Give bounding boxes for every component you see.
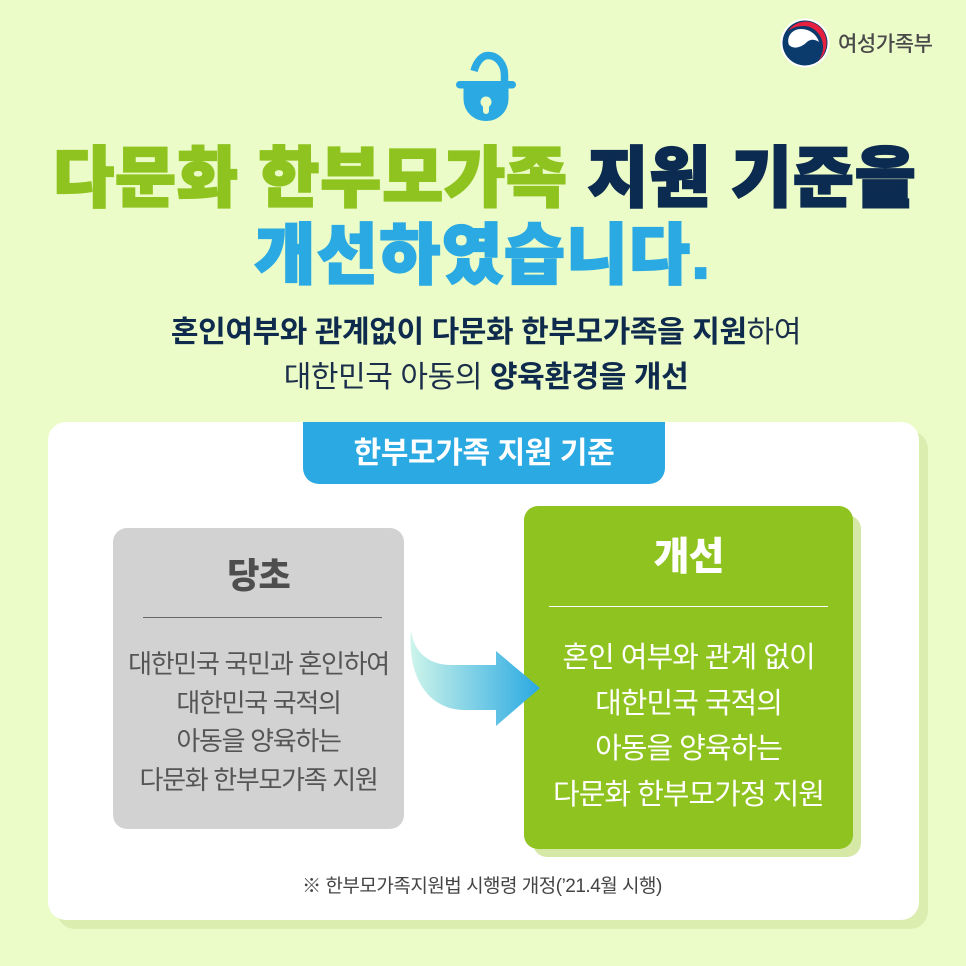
card text: 대한민국 국민과 혼인하여 [128, 649, 389, 679]
card: before [113, 528, 404, 829]
card heading: 개선 [654, 536, 723, 579]
icon: taegeuk emblem [780, 18, 830, 68]
heading tab [303, 422, 665, 484]
card text [553, 642, 824, 810]
title line 2: 개선하였습니다. [254, 218, 711, 292]
divider [549, 606, 828, 607]
subtitle line 2: 대한민국 아동의 양육환경을 개선 [284, 361, 688, 394]
panel: support criteria [48, 422, 919, 920]
text: ministry name: 여성가족부 [838, 33, 933, 56]
divider [143, 617, 382, 618]
card shadow [533, 515, 861, 857]
card text: 다문화 한부모가정 지원 [553, 778, 824, 810]
heading tab: 한부모가족 지원 기준 [354, 437, 614, 470]
footnote: ※ 한부모가족지원법 시행령 개정(’21.4월 시행) [302, 876, 662, 897]
card: improved [524, 506, 853, 849]
card text: 아동을 양육하는 [176, 726, 341, 756]
panel shadow [57, 431, 928, 929]
subtitle line 1: 혼인여부와 관계없이 다문화 한부모가족을 지원하여 [171, 316, 801, 349]
title line 1: 다문화 한부모가족 지원 기준을 [53, 141, 917, 215]
card text: 대한민국 국적의 [176, 688, 341, 718]
card text: 아동을 양육하는 [595, 733, 782, 765]
card text [128, 649, 389, 794]
card text: 다문화 한부모가족 지원 [139, 764, 378, 794]
logo: ministry emblem and name [780, 18, 933, 68]
icon: open padlock [456, 52, 516, 121]
arrow [410, 630, 540, 726]
card text: 대한민국 국적의 [595, 688, 782, 720]
card heading: 당초 [227, 557, 290, 596]
card text: 혼인 여부와 관계 없이 [562, 642, 815, 674]
